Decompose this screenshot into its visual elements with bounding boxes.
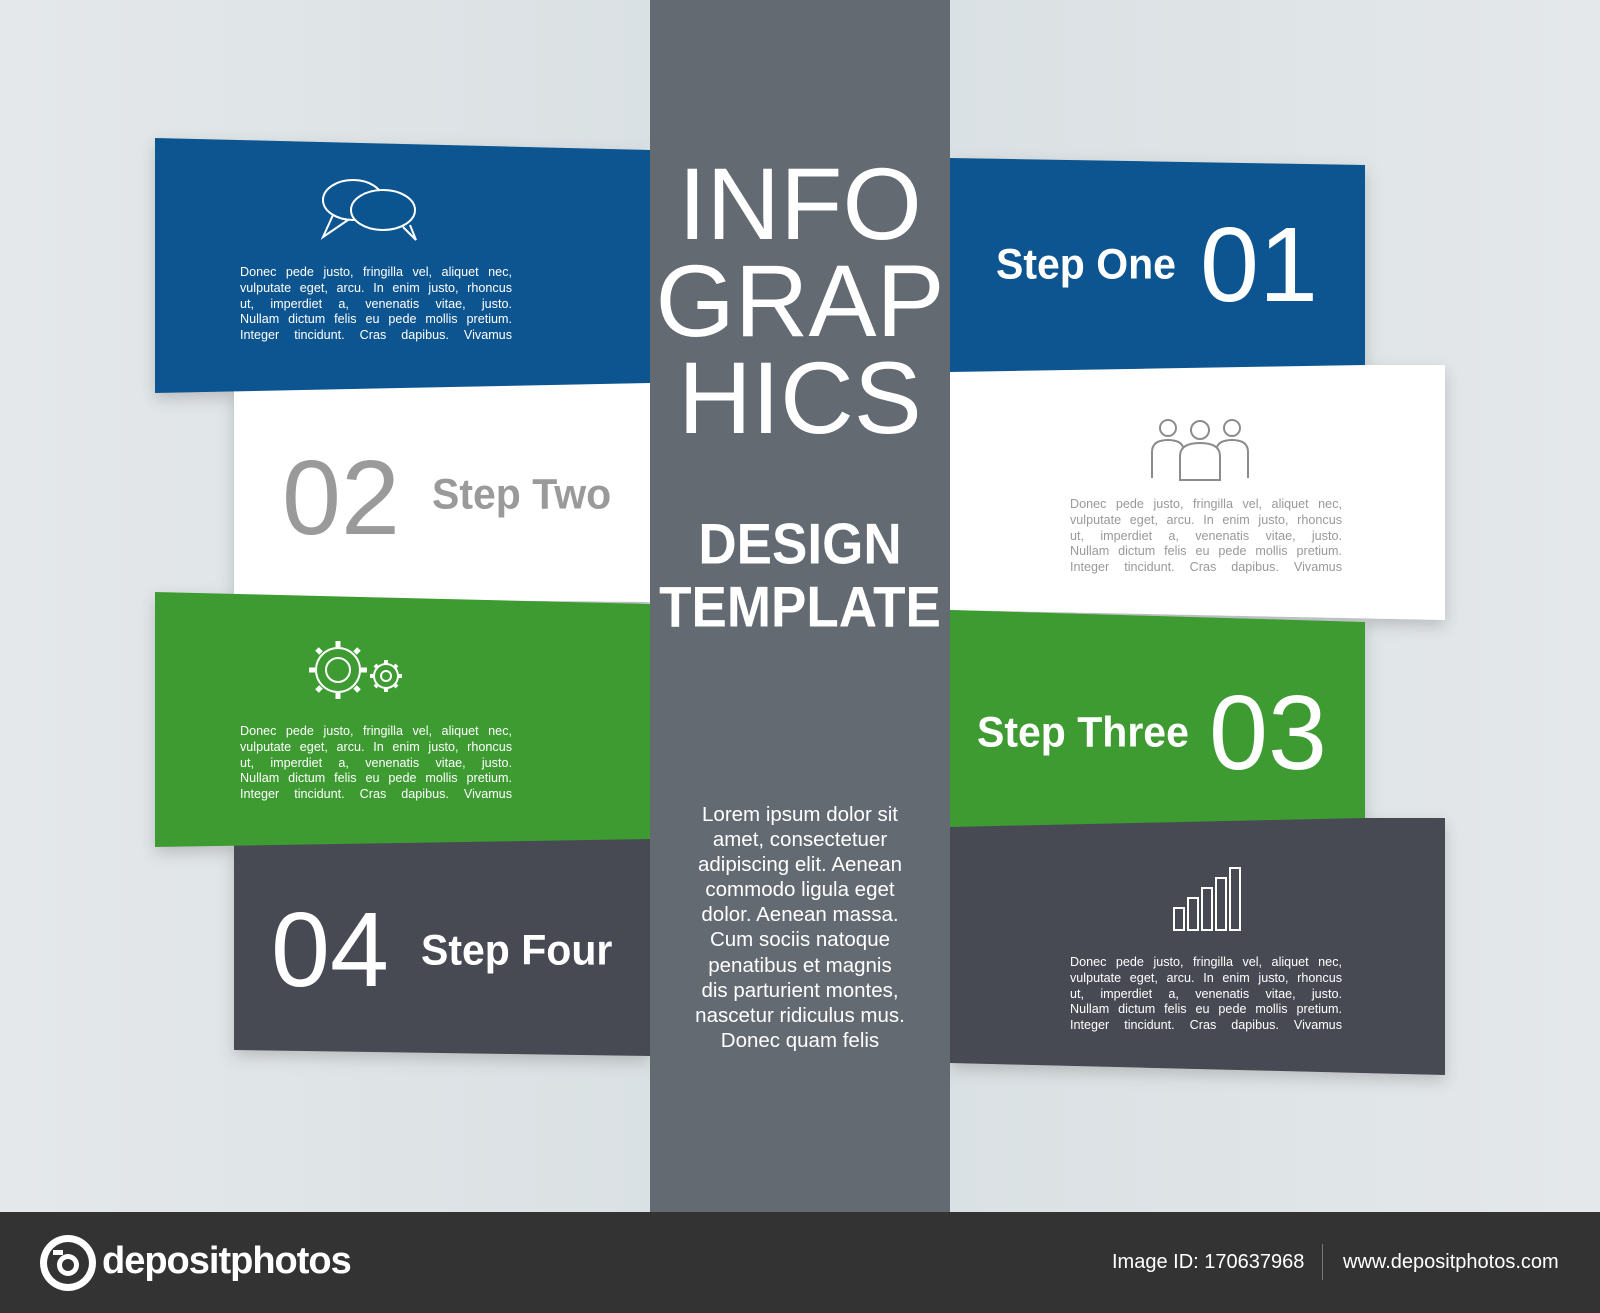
text: dark right paragraph: Nullam dictum felis eu pede mollis pretium. — [1070, 1002, 1342, 1016]
text: green left paragraph: vulputate eget, arcu. In enim justo, rhoncus — [240, 740, 512, 754]
center paragraph: Lorem ipsum dolor sit — [702, 803, 898, 826]
step four label — [271, 891, 612, 1009]
image id: Image ID: 170637968 — [1112, 1251, 1304, 1273]
subtitle: DESIGN — [698, 513, 902, 577]
footer bar — [0, 1212, 1600, 1313]
step four label: 04 — [271, 891, 389, 1009]
center paragraph: Cum sociis natoque — [710, 928, 890, 951]
text: white right paragraph — [1070, 497, 1342, 574]
text: blue left paragraph: Integer tincidunt. Cras dapibus. Vivamus — [240, 328, 512, 342]
text: blue left paragraph: ut, imperdiet a, venenatis vitae, justo. — [240, 297, 512, 311]
center paragraph: amet, consectetuer — [713, 828, 887, 851]
text: dark right paragraph: ut, imperdiet a, venenatis vitae, justo. — [1070, 987, 1342, 1001]
step two label: Step Two — [432, 470, 611, 518]
text: green left paragraph: ut, imperdiet a, venenatis vitae, justo. — [240, 756, 512, 770]
title: INFO — [678, 147, 922, 261]
text: blue left paragraph: Donec pede justo, fringilla vel, aliquet nec, — [240, 265, 512, 279]
text: dark right paragraph: Donec pede justo, fringilla vel, aliquet nec, — [1070, 955, 1342, 969]
text: blue left paragraph: Nullam dictum felis eu pede mollis pretium. — [240, 312, 512, 326]
icon: gears — [309, 641, 402, 699]
center paragraph: commodo ligula eget — [705, 878, 895, 901]
center paragraph: adipiscing elit. Aenean — [698, 853, 902, 876]
step one label: 01 — [1200, 206, 1318, 324]
step one label: Step One — [996, 240, 1176, 288]
text: white right paragraph: Nullam dictum felis eu pede mollis pretium. — [1070, 544, 1342, 558]
icon: people — [1151, 419, 1249, 481]
subtitle: TEMPLATE — [659, 576, 941, 639]
text: white right paragraph: Donec pede justo, fringilla vel, aliquet nec, — [1070, 497, 1342, 511]
text: dark right paragraph — [1070, 955, 1342, 1032]
icon: speech bubbles — [320, 179, 417, 241]
text: dark right paragraph: Integer tincidunt. Cras dapibus. Vivamus — [1070, 1018, 1342, 1032]
step one label — [996, 206, 1318, 324]
center paragraph: dolor. Aenean massa. — [701, 903, 899, 926]
center paragraph: dis parturient montes, — [701, 979, 899, 1002]
center paragraph: nascetur ridiculus mus. — [695, 1004, 905, 1027]
text: green left paragraph: Integer tincidunt. Cras dapibus. Vivamus — [240, 787, 512, 801]
icon: bar chart — [1173, 867, 1241, 931]
text: blue left paragraph: vulputate eget, arcu. In enim justo, rhoncus — [240, 281, 512, 295]
text: green left paragraph — [240, 724, 512, 801]
text: white right paragraph: ut, imperdiet a, venenatis vitae, justo. — [1070, 529, 1342, 543]
icon: logo — [40, 1235, 96, 1291]
text: green left paragraph: Nullam dictum felis eu pede mollis pretium. — [240, 771, 512, 785]
step three label: 03 — [1209, 674, 1327, 792]
text: white right paragraph: vulputate eget, arcu. In enim justo, rhoncus — [1070, 513, 1342, 527]
step two label: 02 — [282, 439, 400, 557]
center paragraph — [695, 803, 905, 1052]
text: blue left paragraph — [240, 265, 512, 342]
subtitle — [659, 513, 941, 639]
url: www.depositphotos.com — [1343, 1251, 1559, 1273]
step three label: Step Three — [977, 708, 1189, 756]
step two label — [282, 439, 611, 557]
text: green left paragraph: Donec pede justo, fringilla vel, aliquet nec, — [240, 724, 512, 738]
text: dark right paragraph: vulputate eget, arcu. In enim justo, rhoncus — [1070, 971, 1342, 985]
logo text: depositphotos — [102, 1240, 351, 1282]
center paragraph: Donec quam felis — [721, 1029, 879, 1052]
text: white right paragraph: Integer tincidunt. Cras dapibus. Vivamus — [1070, 560, 1342, 574]
step four label: Step Four — [421, 926, 612, 974]
title: HICS — [678, 341, 922, 455]
title: GRAP — [655, 244, 945, 358]
center paragraph: penatibus et magnis — [708, 954, 892, 977]
title — [655, 147, 945, 455]
step three label — [977, 674, 1327, 792]
